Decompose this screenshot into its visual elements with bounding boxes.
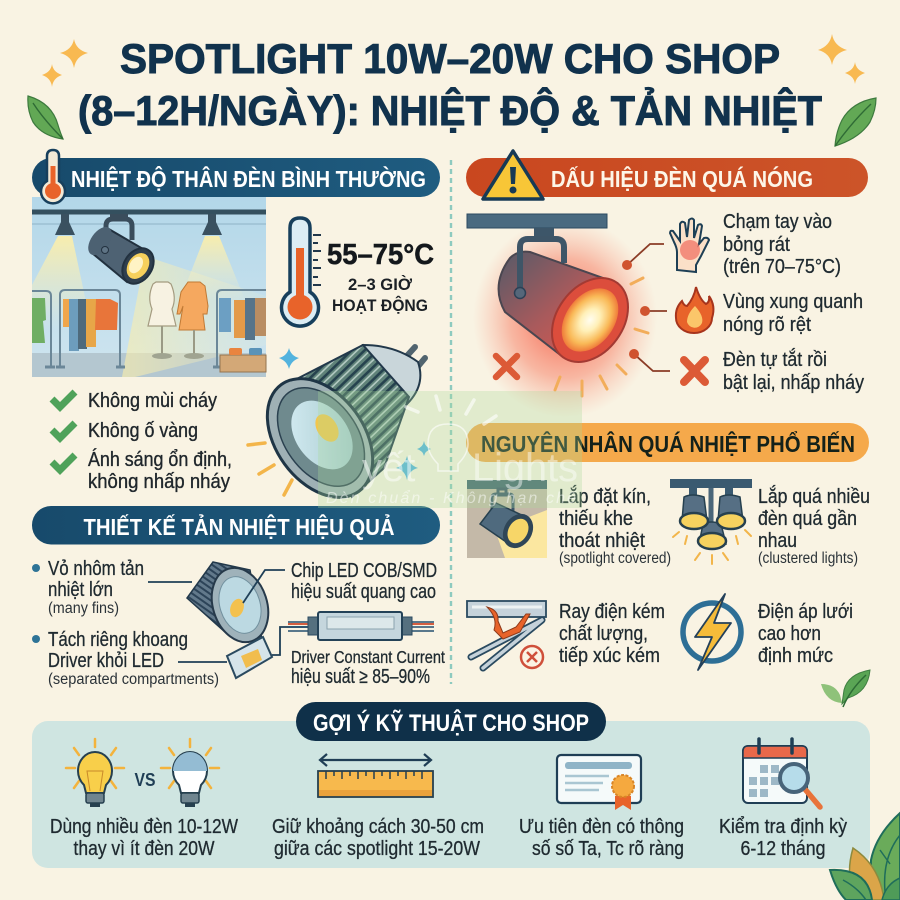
driver box xyxy=(288,612,434,640)
panel: overheating signs xyxy=(466,151,868,418)
leader line: fins xyxy=(148,581,192,583)
left labels: Tách riêng khoang xyxy=(48,629,188,651)
mannequins xyxy=(148,282,208,359)
icon: thermometer large xyxy=(282,218,321,326)
leader lines xyxy=(178,570,308,662)
right labels: hiệu suất ≥ 85–90% xyxy=(291,666,430,688)
watermark: yết xyxy=(362,446,415,490)
left labels: nhiệt lớn xyxy=(48,579,113,601)
left labels: Vỏ nhôm tản xyxy=(48,558,144,580)
sign labels: bật lại, nhấp nháy xyxy=(723,372,864,394)
sign labels: Chạm tay vào xyxy=(723,211,832,233)
hot spotlight xyxy=(467,214,657,418)
heatsink small xyxy=(187,561,277,649)
right labels: Chip LED COB/SMD xyxy=(291,560,437,582)
sign labels: Đèn tự tắt rồi xyxy=(723,348,827,371)
text: rail: tiếp xúc kém xyxy=(559,645,660,667)
icon: red X xyxy=(684,360,705,382)
text: rail: chất lượng, xyxy=(559,623,648,645)
text: covered: (spotlight covered) xyxy=(559,550,671,567)
right labels: Driver Constant Current xyxy=(291,647,445,667)
checklist: Ánh sáng ổn định, xyxy=(88,448,232,471)
left labels xyxy=(32,558,219,688)
heading pill: NGUYÊN NHÂN QUÁ NHIỆT PHỔ BIẾN xyxy=(481,430,855,457)
text: rail xyxy=(559,601,665,667)
icon: certificate xyxy=(557,755,641,810)
checklist: Không mùi cháy xyxy=(88,390,217,412)
sign labels: Vùng xung quanh xyxy=(723,291,863,313)
right labels: hiệu suất quang cao xyxy=(291,581,436,603)
icon: hand xyxy=(670,218,709,272)
table with folded clothes xyxy=(220,348,266,372)
panel: heat dissipation design xyxy=(32,506,445,688)
text: covered: thiếu khe xyxy=(559,508,633,530)
text: voltage: Điện áp lưới xyxy=(758,601,853,623)
heading pill: DẤU HIỆU ĐÈN QUÁ NÓNG xyxy=(551,165,813,192)
icon: calendar and magnifier xyxy=(743,739,820,807)
heading pill xyxy=(466,158,868,197)
icon: ruler xyxy=(318,754,433,797)
text: rail: Ray điện kém xyxy=(559,601,665,623)
icon: thermometer small xyxy=(41,150,65,203)
temperature value: 55–75°C xyxy=(327,239,434,271)
shop scene illustration xyxy=(32,197,266,377)
icon: bulb comparison xyxy=(66,739,219,807)
heading pill: GỢI Ý KỸ THUẬT CHO SHOP xyxy=(313,709,589,737)
icon: sparkles right xyxy=(818,34,865,84)
text: tip 1: thay vì ít đèn 20W xyxy=(74,838,215,860)
text: covered: Lắp đặt kín, xyxy=(559,485,651,508)
right labels xyxy=(291,560,445,688)
panel: technical tips xyxy=(32,702,870,868)
temperature value: 2–3 GIỜ xyxy=(348,275,412,294)
icon: clustered lights xyxy=(670,479,752,564)
left labels: Driver khỏi LED xyxy=(48,650,164,672)
checklist: không nhấp nháy xyxy=(88,471,230,493)
clothing racks xyxy=(32,290,266,367)
checklist: Không ố vàng xyxy=(88,420,198,442)
text: tip 2: Giữ khoảng cách 30-50 cm xyxy=(272,816,484,838)
watermark: Lights xyxy=(472,446,578,490)
title xyxy=(78,35,822,134)
heading pill xyxy=(32,506,440,544)
watermark xyxy=(318,391,582,508)
icon: bulb comparison: VS xyxy=(134,770,156,790)
light rays xyxy=(248,443,292,495)
text: voltage: cao hơn xyxy=(758,623,821,645)
icon: covered spotlight xyxy=(467,480,547,558)
icon: leaf left xyxy=(28,96,63,139)
divider xyxy=(450,160,452,684)
icon: flame xyxy=(676,287,713,333)
left labels: (many fins) xyxy=(48,600,119,617)
text: tip 3: Ưu tiên đèn có thông xyxy=(519,816,684,838)
title: (8–12H/NGÀY): NHIỆT ĐỘ & TẢN NHIỆT xyxy=(78,87,822,134)
heading pill: NHIỆT ĐỘ THÂN ĐÈN BÌNH THƯỜNG xyxy=(71,165,426,192)
spotlight xyxy=(83,214,160,290)
icon: leaf right xyxy=(835,98,876,146)
icon: voltage xyxy=(683,594,741,670)
rays xyxy=(555,278,648,396)
text: tip 4: Kiểm tra định kỳ xyxy=(719,816,847,838)
text: clustered xyxy=(758,485,870,567)
text: clustered: Lắp quá nhiều xyxy=(758,485,870,508)
sign labels xyxy=(723,211,864,394)
text: voltage: định mức xyxy=(758,645,833,667)
title: SPOTLIGHT 10W–20W CHO SHOP xyxy=(120,35,780,82)
clothes xyxy=(32,298,266,351)
text: clustered: đèn quá gần xyxy=(758,508,857,530)
sign labels: bỏng rát xyxy=(723,234,790,256)
callout dots xyxy=(622,260,650,359)
LED chip board xyxy=(227,637,272,678)
icon: corner leaves xyxy=(830,813,900,900)
temperature value xyxy=(327,239,434,315)
callout lines xyxy=(627,244,670,371)
illustration: LED heatsink module xyxy=(246,345,425,517)
watermark: Đèn chuẩn - Không hạn chế xyxy=(326,489,577,507)
sparkles xyxy=(279,348,431,480)
heading pill xyxy=(32,158,440,197)
text: covered: thoát nhiệt xyxy=(559,530,645,552)
panel: normal temperature xyxy=(32,150,440,517)
text: covered xyxy=(559,485,671,567)
icon: poor rail xyxy=(467,601,546,668)
icon: left X xyxy=(496,356,517,377)
text: tip 1 xyxy=(50,816,238,860)
text: tip 3: số số Ta, Tc rõ ràng xyxy=(532,838,684,860)
left labels: (separated compartments) xyxy=(48,671,219,688)
text: tip 4: 6-12 tháng xyxy=(740,838,826,860)
text: tip 4 xyxy=(719,816,847,860)
text: clustered: (clustered lights) xyxy=(758,550,858,567)
text: tip 2: giữa các spotlight 15-20W xyxy=(274,838,480,860)
text: voltage xyxy=(758,601,853,667)
sign labels: (trên 70–75°C) xyxy=(723,256,841,278)
heading pill xyxy=(466,423,869,462)
text: clustered: nhau xyxy=(758,530,797,552)
panel: common causes xyxy=(466,423,870,707)
icon: warning triangle xyxy=(483,151,543,199)
icon: sparkles left xyxy=(42,39,88,87)
text: tip 1: Dùng nhiều đèn 10-12W xyxy=(50,816,238,838)
heading pill xyxy=(296,702,606,741)
icon: leaves xyxy=(821,670,870,707)
heading pill: THIẾT KẾ TẢN NHIỆT HIỆU QUẢ xyxy=(84,512,395,540)
checklist xyxy=(52,390,232,493)
text: tip 2 xyxy=(272,816,484,860)
sign labels: nóng rõ rệt xyxy=(723,314,811,336)
temperature value: HOẠT ĐỘNG xyxy=(332,296,428,315)
text: tip 3 xyxy=(519,816,684,860)
